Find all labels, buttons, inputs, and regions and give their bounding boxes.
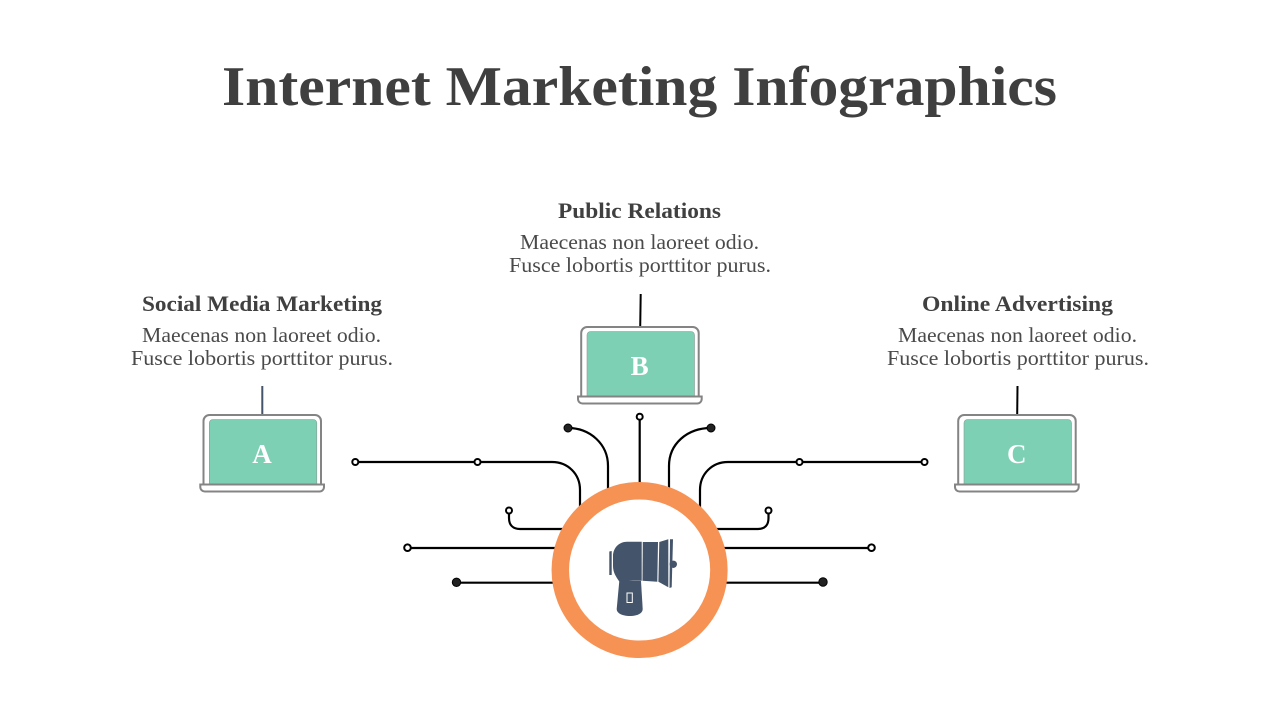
laptop A: A [252,439,272,469]
text block: Social Media Marketing [131,291,393,370]
text block: Online Advertising: Online Advertising [922,291,1113,316]
text block: Public Relations: Fusce lobortis porttitor purus. [509,253,771,277]
laptop C: C [1007,439,1026,469]
text block: Social Media Marketing: Fusce lobortis porttitor purus. [131,346,393,370]
connector: B stem [639,294,642,327]
circuit line: centre [637,414,643,486]
laptop A [200,415,324,492]
title: Internet Marketing Infographics [222,56,1057,118]
laptop C [955,415,1079,492]
icon: megaphone [609,539,677,616]
text block: Social Media Marketing: Maecenas non laoreet odio. [142,323,381,347]
text block: Public Relations [509,198,771,277]
text block: Public Relations: Maecenas non laoreet odio. [520,230,759,254]
text block: Social Media Marketing: Social Media Marketing [142,291,382,316]
connector: C stem [1016,386,1018,414]
circuit lines: left [352,424,608,586]
text block: Public Relations: Public Relations [558,198,721,223]
text block: Online Advertising: Fusce lobortis porttitor purus. [887,346,1149,370]
orange ring [560,491,719,649]
circuit lines: right [669,424,928,586]
laptop B: B [631,351,649,381]
connector: A stem [261,386,263,415]
text block: Online Advertising: Maecenas non laoreet odio. [898,323,1137,347]
text block: Online Advertising [887,291,1149,370]
laptop B [578,327,702,404]
